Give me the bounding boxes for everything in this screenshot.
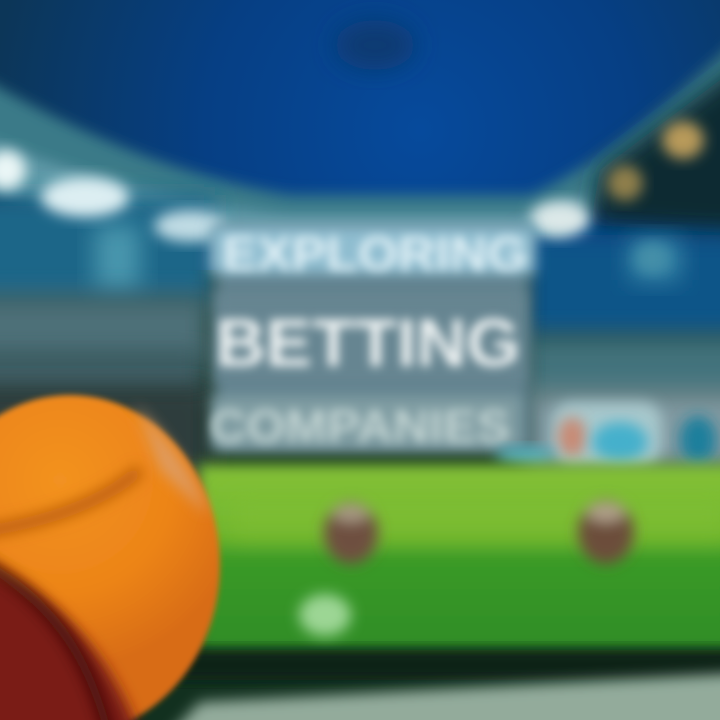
dark upper right stand: [590, 50, 720, 235]
blurred heading text: COMPANIES: [210, 400, 510, 452]
stadium roof ring: [0, 20, 720, 240]
small ball left: [324, 502, 378, 564]
dark foreground band: [170, 650, 720, 680]
blurred heading text: [210, 228, 528, 452]
goal and crowd colours at right: [495, 402, 716, 466]
small ball right: [578, 500, 634, 564]
stadium lights: [0, 121, 704, 272]
green pitch: [198, 464, 720, 652]
large orange ball: [0, 395, 220, 720]
blurred heading text: EXPLORING: [222, 228, 528, 281]
bottom light strip: [165, 672, 720, 720]
right stands: [525, 235, 720, 470]
blurred heading text: BETTING: [216, 305, 520, 381]
central sign panel: [210, 225, 535, 452]
white spot on pitch: [299, 594, 351, 636]
sky dome: [0, 0, 720, 270]
left stands: [0, 195, 215, 475]
